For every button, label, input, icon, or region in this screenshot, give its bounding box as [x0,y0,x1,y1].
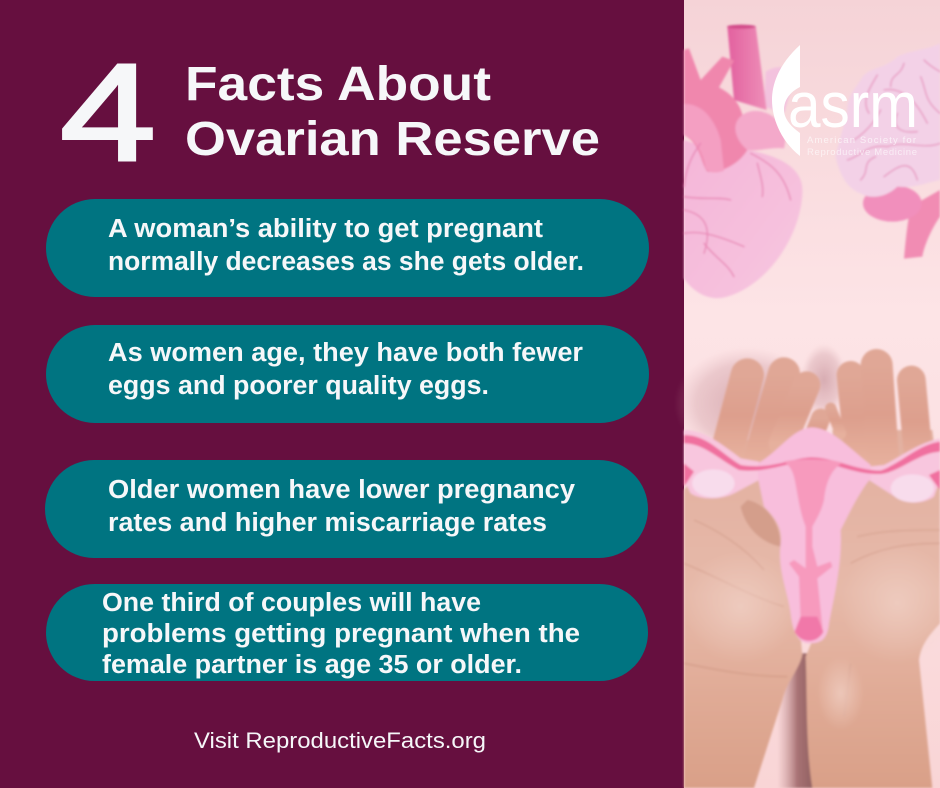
title: Ovarian Reserve [185,113,600,166]
fact pill 3: rates and higher miscarriage rates [108,509,547,537]
fact pill 4 [46,584,648,681]
big number 4: 4 [60,36,156,190]
photo: hands holding paper uterus [674,343,940,788]
fact pill 3 [45,460,648,558]
illustration: paper heart [684,25,802,298]
right hand [806,365,940,788]
footer link text: Visit ReproductiveFacts.org [194,728,486,753]
fact pill 2: eggs and poorer quality eggs. [108,372,489,400]
fact pill 2: As women age, they have both fewer [108,339,583,367]
left hand [684,373,821,788]
ASRM logo: American Society for [807,135,916,146]
fact pill 3: Older women have lower pregnancy [108,476,576,504]
ASRM logo: asrm [788,69,918,141]
title [185,58,600,166]
title: Facts About [185,58,491,111]
illustration: paper brain [836,43,940,259]
photo panel background [684,0,940,788]
ASRM logo [772,45,918,158]
fact pill 1: A woman’s ability to get pregnant [108,215,544,243]
ASRM logo: Reproductive Medicine [807,147,917,158]
fact pill 1 [46,199,649,297]
fact pill 2 [46,325,649,423]
fact pill 1: normally decreases as she gets older. [108,248,584,276]
fact pill 4: problems getting pregnant when the [102,620,580,648]
fact pill 4: One third of couples will have [102,589,481,617]
paper uterus [684,427,940,643]
logo crescent [772,45,800,156]
left maroon panel [0,0,684,788]
fact pill 4: female partner is age 35 or older. [102,651,522,679]
